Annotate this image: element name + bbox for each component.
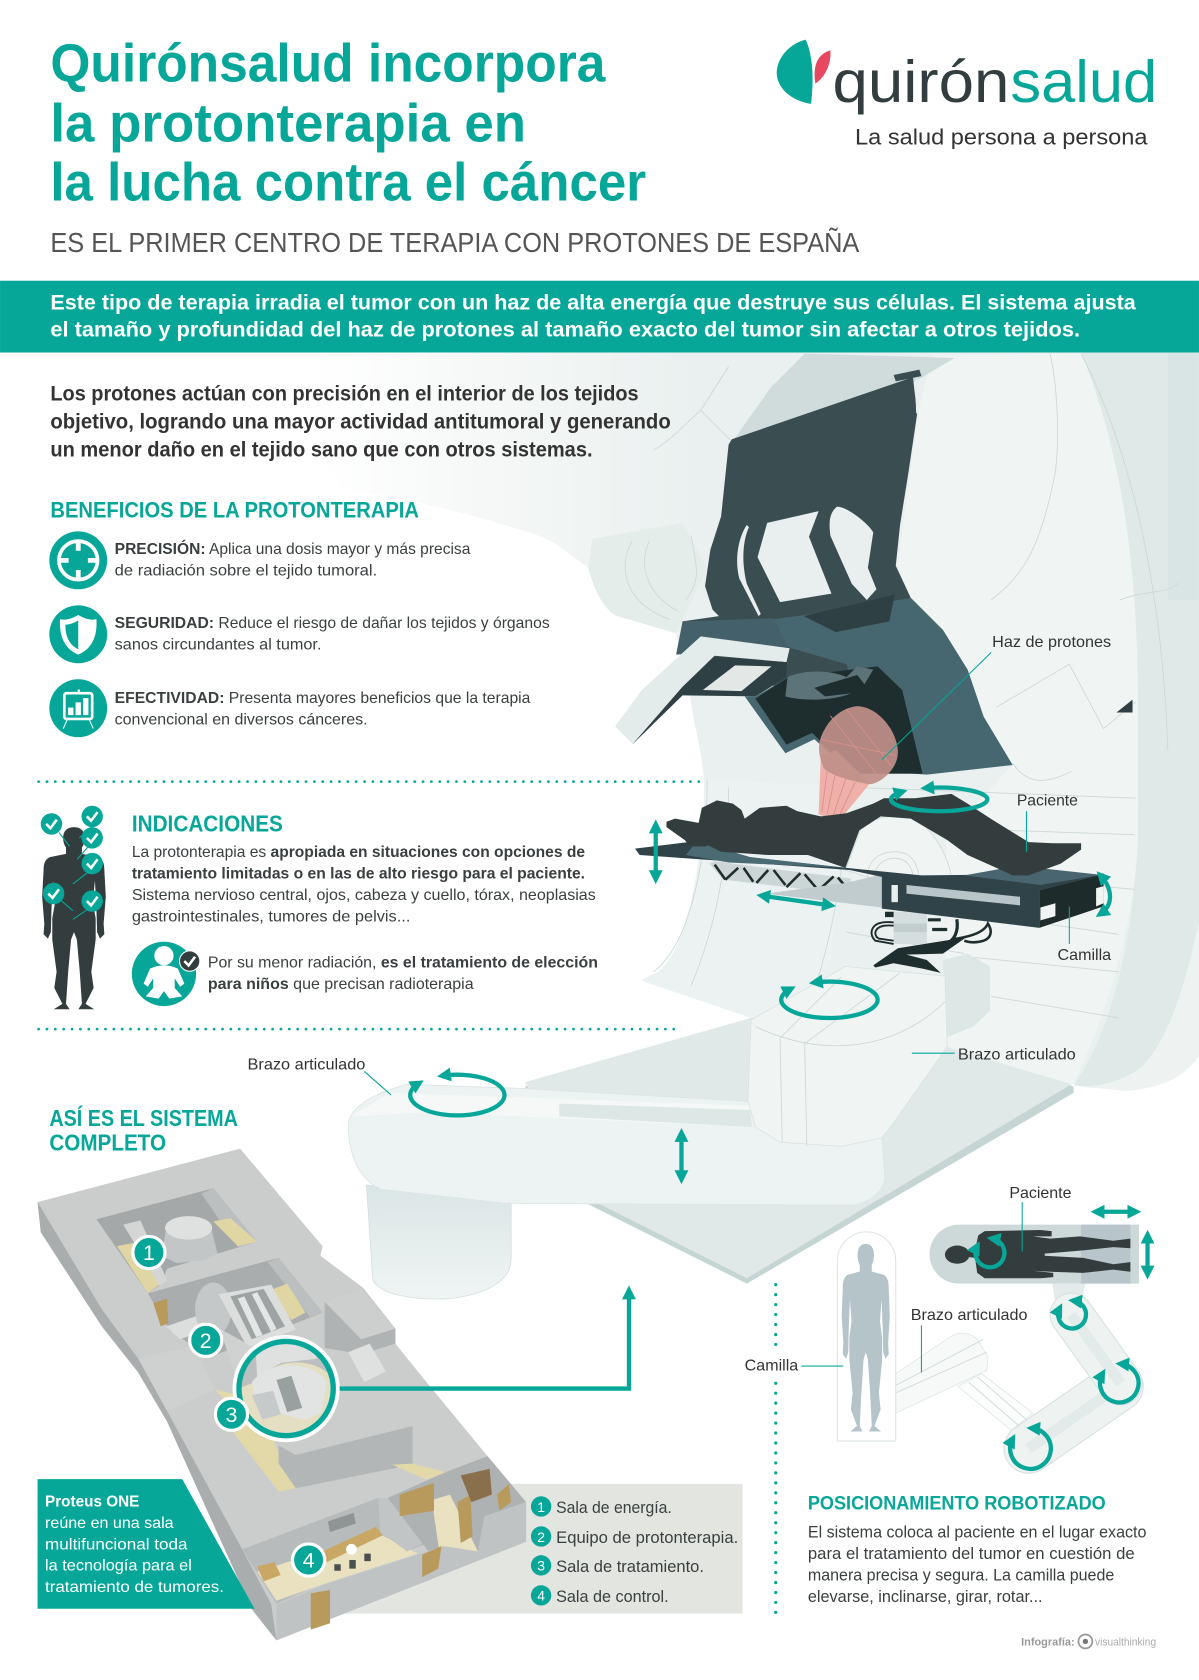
- legend: rooms: 1: [537, 1499, 545, 1515]
- illustration: proton therapy gantry room: [305, 352, 1199, 1091]
- room 1: [96, 1188, 257, 1293]
- logo: quirón: [833, 50, 1009, 115]
- logo: [777, 40, 1157, 150]
- title: la protonterapia en: [50, 94, 526, 153]
- arrow: arm joint rotation 1: [1058, 1301, 1086, 1328]
- text: effectiveness: convencional en diversos cánceres.: [115, 710, 368, 728]
- label: Camilla: Camilla: [1058, 946, 1111, 964]
- label: Brazo articulado left: Brazo articulado: [248, 1055, 365, 1073]
- illustration: patient silhouette: [666, 794, 1081, 875]
- teal intro band: Este tipo de terapia irradia el tumor con un haz de alta energía que destruye sus células. El sistema ajusta: [50, 291, 1137, 315]
- callout: Proteus ONE: tratamiento de tumores.: [45, 1578, 224, 1596]
- arrow: arm joint rotation 3: [1010, 1428, 1051, 1469]
- badge: room 2: [190, 1324, 222, 1356]
- badge: room 2: 2: [200, 1329, 212, 1353]
- text: precision: PRECISIÓN: Aplica una dosis mayor y más precisa: [115, 539, 470, 558]
- text: children: [208, 953, 598, 993]
- building roof outline: [38, 1149, 526, 1640]
- label: Brazo articulado diagram: [911, 1306, 1028, 1372]
- illustration: arch under table: [845, 816, 952, 902]
- text: indicaciones: tratamiento limitadas o en las de alto riesgo para el paciente.: [132, 865, 585, 883]
- text: children: Por su menor radiación, es el tratamiento de elección: [208, 953, 598, 971]
- text: posicionamiento: elevarse, inclinarse, girar, rotar...: [808, 1587, 1043, 1606]
- illustration: proton beam: [819, 706, 898, 817]
- diagram: upright stretcher: [837, 1232, 896, 1441]
- illustration: building floor plan: [38, 1149, 526, 1640]
- text: indicaciones: [132, 843, 596, 925]
- arrow: rotation at arm block: [781, 982, 878, 1018]
- icon: child: [132, 942, 200, 1006]
- text: posicionamiento: manera precisa y segura. La camilla puede: [808, 1565, 1114, 1584]
- icon: effectiveness chart: [49, 679, 107, 737]
- text: effectiveness: [115, 689, 530, 728]
- illustration: patient table with truss: [635, 841, 1104, 928]
- callout connector line: [334, 1291, 629, 1389]
- corridor and inner wall: [215, 1390, 446, 1491]
- arrow: lower arm vertical: [679, 1134, 683, 1179]
- legend: rooms: 2: [537, 1529, 545, 1545]
- text: indicaciones: La protonterapia es apropiada en situaciones con opciones de: [132, 843, 585, 861]
- legend: rooms: 4: [537, 1588, 545, 1604]
- callout circle: treatment room: [233, 1335, 340, 1442]
- label: Camilla diagram: Camilla: [745, 1356, 798, 1374]
- arrow: table vertical: [654, 825, 658, 879]
- badge: room 3: [215, 1398, 248, 1430]
- badge: room 3: 3: [226, 1403, 237, 1427]
- building outer left wall: [38, 1202, 276, 1640]
- legend: rooms: Sala de tratamiento.: [556, 1557, 704, 1576]
- credit: visualthinking: [1095, 1637, 1156, 1649]
- text: posicionamiento: [808, 1522, 1146, 1606]
- label: Paciente: Paciente: [1017, 792, 1078, 810]
- label: Paciente top view: Paciente: [1009, 1184, 1072, 1202]
- badge: room 4: [293, 1544, 325, 1576]
- logo: salud: [1010, 50, 1157, 115]
- label: Brazo articulado right: Brazo articulado: [958, 1046, 1076, 1064]
- label: Paciente top view: [1009, 1184, 1072, 1251]
- badge: room 4: 4: [303, 1549, 315, 1573]
- text: precision: [115, 539, 470, 579]
- callout: Proteus ONE: reúne en una sala: [45, 1514, 174, 1532]
- diagram: patient top view: [929, 1225, 1139, 1284]
- intro paragraph: objetivo, logrando una mayor actividad antitumoral y generando: [50, 410, 671, 434]
- arrow: rotation at patient: [891, 788, 987, 811]
- heading: indicaciones: INDICACIONES: [132, 810, 283, 836]
- subtitle: ES EL PRIMER CENTRO DE TERAPIA CON PROTONES DE ESPAÑA: [50, 227, 860, 258]
- text: effectiveness: EFECTIVIDAD: Presenta mayores beneficios que la terapia: [115, 689, 530, 707]
- label: Camilla diagram: [745, 1356, 843, 1374]
- callout: Proteus ONE: multifuncional toda: [45, 1535, 188, 1553]
- title: Quirónsalud incorpora: [50, 34, 607, 93]
- label: Brazo articulado left: [248, 1055, 391, 1095]
- diagram: robotic arm top view: [896, 1284, 1121, 1449]
- illustration: under-table mechanism: [872, 912, 991, 973]
- arrow: rotation at lower arm: [410, 1075, 504, 1115]
- arrow: arm joint rotation 2: [1100, 1364, 1139, 1402]
- room 4 and annex: [242, 1456, 526, 1640]
- heading: sistema completo: ASÍ ES EL SISTEMA: [49, 1104, 238, 1131]
- icon: body with indication checks: [41, 806, 106, 1009]
- icon: precision target: [49, 531, 107, 589]
- heading: beneficios: BENEFICIOS DE LA PROTONTERAPIA: [50, 498, 419, 523]
- heading: sistema completo: [49, 1104, 238, 1156]
- teal intro band: [0, 281, 1199, 352]
- callout: Proteus ONE: Proteus ONE: [45, 1492, 140, 1510]
- illustration: pedestal: [366, 1185, 511, 1299]
- legend: rooms: Sala de energía.: [556, 1498, 672, 1517]
- text: security: SEGURIDAD: Reduce el riesgo de dañar los tejidos y órganos: [115, 614, 550, 632]
- text: children: para niños que precisan radioterapia: [208, 975, 474, 993]
- text: indicaciones: gastrointestinales, tumores de pelvis...: [132, 907, 410, 925]
- credit: Infografía:: [1021, 1637, 1075, 1649]
- legend background panel: [321, 1484, 743, 1614]
- illustration: vertical arm block: [748, 954, 990, 1146]
- text: posicionamiento: para el tratamiento del tumor en cuestión de: [808, 1544, 1135, 1563]
- arrow: top view rotation: [975, 1239, 1004, 1267]
- illustration: dark nozzle panel: [615, 370, 1133, 775]
- label: Brazo articulado diagram: Brazo articulado: [911, 1306, 1028, 1324]
- arrow: top view vertical: [1146, 1235, 1150, 1274]
- icon: security shield: [49, 605, 107, 663]
- title: la lucha contra el cáncer: [50, 153, 646, 212]
- text: security: [115, 614, 550, 653]
- text: posicionamiento: El sistema coloca al paciente en el lugar exacto: [808, 1522, 1146, 1542]
- legend: rooms: Equipo de protonterapia.: [556, 1528, 738, 1547]
- teal intro band: el tamaño y profundidad del haz de protones al tamaño exacto del tumor sin afectar a otros tejidos.: [50, 317, 1080, 341]
- heading: sistema completo: COMPLETO: [49, 1130, 166, 1156]
- callout: Proteus ONE: la tecnología para el: [45, 1557, 192, 1575]
- text: indicaciones: Sistema nervioso central, ojos, cabeza y cuello, tórax, neoplasias: [132, 886, 596, 904]
- legend: rooms: [531, 1496, 738, 1606]
- label: Haz de protones: Haz de protones: [992, 633, 1111, 651]
- arrow: table horizontal: [762, 896, 830, 905]
- intro paragraph: un menor daño en el tejido sano que con otros sistemas.: [50, 437, 593, 461]
- text: security: sanos circundantes al tumor.: [115, 635, 321, 653]
- logo: La salud persona a persona: [855, 125, 1148, 150]
- intro paragraph: Los protones actúan con precisión en el interior de los tejidos: [50, 382, 639, 406]
- credit: [1021, 1634, 1156, 1649]
- badge: room 1: [133, 1236, 165, 1269]
- arrow: table tilt: [1100, 875, 1110, 914]
- label: Camilla: [1058, 906, 1111, 964]
- arrow: top view horizontal: [1096, 1210, 1136, 1214]
- title: [50, 34, 646, 212]
- label: Haz de protones: [882, 633, 1111, 760]
- callout: Proteus ONE: [38, 1479, 255, 1609]
- illustration: lower articulated arm: [348, 1084, 885, 1205]
- text: precision: de radiación sobre el tejido tumoral.: [115, 561, 377, 579]
- legend: rooms: 3: [537, 1558, 545, 1574]
- side blocks: [138, 1288, 395, 1411]
- badge: room 1: 1: [143, 1241, 155, 1265]
- illustration: floor plate: [525, 1018, 1074, 1284]
- legend: rooms: Sala de control.: [556, 1587, 669, 1606]
- label: Paciente: [1017, 792, 1078, 852]
- room 2: [148, 1258, 323, 1393]
- heading: posicionamiento robotizado: POSICIONAMIENTO ROBOTIZADO: [808, 1494, 1106, 1515]
- intro paragraph: [50, 382, 671, 461]
